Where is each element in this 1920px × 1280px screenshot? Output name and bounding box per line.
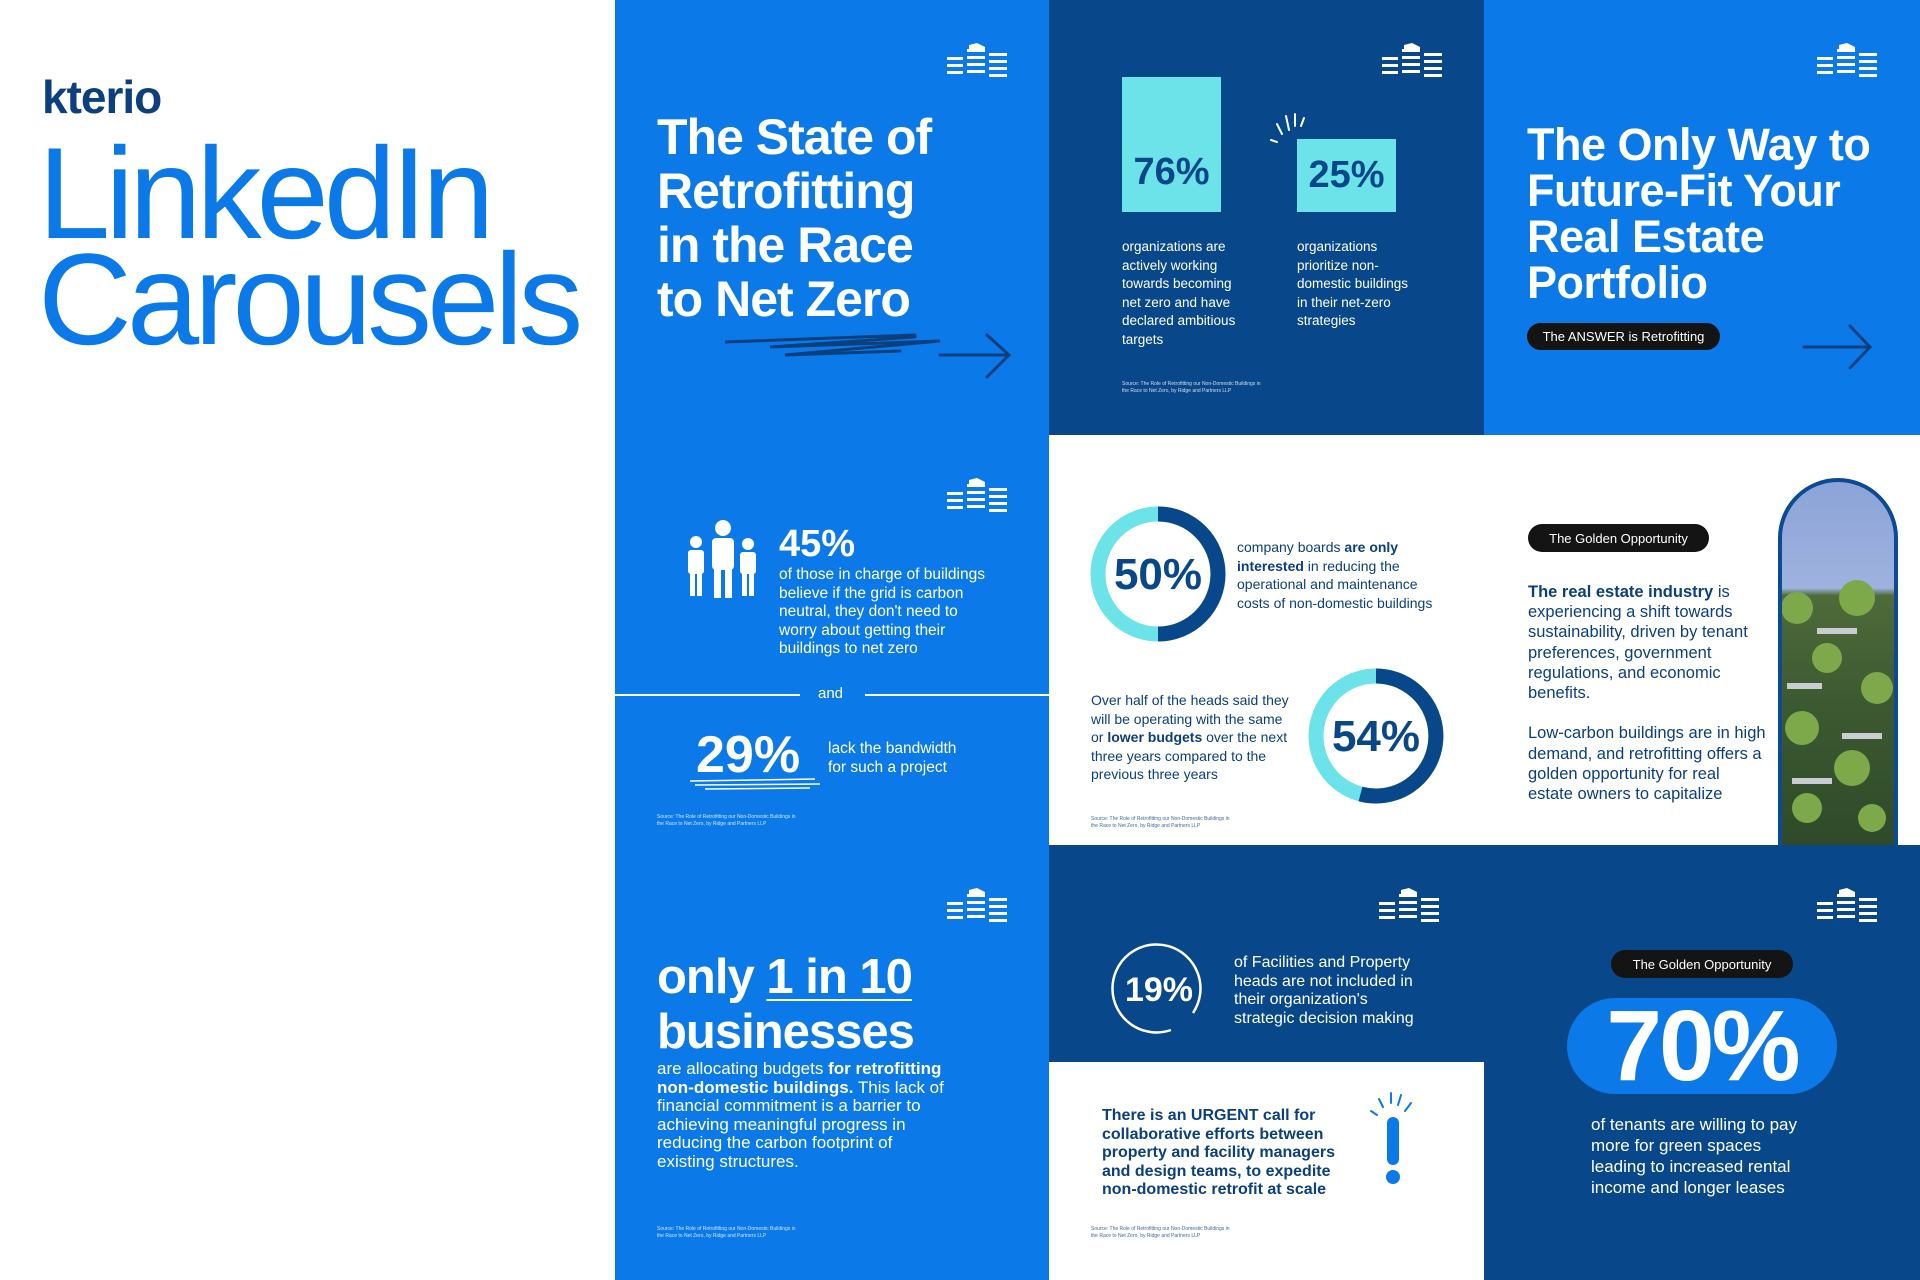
text 29%	[828, 740, 956, 776]
ring 54%	[1308, 668, 1444, 804]
main title	[38, 120, 579, 372]
panel: 45% and 29%	[615, 435, 1049, 845]
icon: buildings	[1382, 43, 1442, 77]
heading: in the Race	[657, 217, 913, 273]
text 29%: lack the bandwidth	[828, 740, 956, 757]
source	[657, 1226, 796, 1239]
panel: 50% and 54% rings	[1049, 435, 1484, 845]
pill	[1527, 323, 1720, 350]
body text: are allocating budgets for retrofitting non-domestic buildings. This lack of financial commitment is a barrier to achieving meaningful progress in reducing the carbon footprint of existing structures.	[657, 1059, 944, 1170]
heading: Future-Fit Your	[1527, 165, 1840, 216]
icon: buildings	[947, 478, 1007, 512]
heading: only 1 in 10	[657, 950, 912, 1004]
scribble underline	[690, 778, 820, 790]
panel: 19% and urgent call	[1049, 845, 1484, 1280]
source	[1122, 381, 1261, 394]
source	[1091, 816, 1230, 829]
stat 70%: 70%	[1606, 990, 1798, 1102]
arrow	[1802, 324, 1872, 370]
divider with and: and	[818, 685, 843, 702]
icon: buildings	[947, 888, 1007, 922]
source: the Race to Net Zero, by Ridge and Partners LLP	[657, 821, 766, 827]
source: Source: The Role of Retrofitting our Non-Domestic Buildings in	[657, 814, 796, 820]
heading	[657, 950, 914, 1059]
source: Source: The Role of Retrofitting our Non-Domestic Buildings in	[1091, 816, 1230, 822]
pill: The Golden Opportunity	[1549, 530, 1688, 546]
stat 70%	[1567, 998, 1837, 1094]
stat 45%: 45%	[779, 523, 855, 565]
pill	[1528, 524, 1709, 552]
main title: Carousels	[38, 226, 578, 372]
text 45%: of those in charge of buildings believe if the grid is carbon neutral, they don't need to worry about getting their buildings to net zero	[779, 566, 985, 657]
text block	[1528, 583, 1766, 803]
heading: to Net Zero	[657, 271, 910, 327]
image: green building arch	[1778, 478, 1898, 845]
heading: Real Estate	[1527, 211, 1764, 262]
pill	[1611, 950, 1793, 978]
text 50%: company boards are only interested in reducing the operational and maintenance costs of non-domestic buildings	[1237, 539, 1432, 610]
heading	[1527, 119, 1870, 308]
source: the Race to Net Zero, by Ridge and Partners LLP	[1091, 823, 1200, 829]
panel: only 1 in 10 businesses	[615, 845, 1049, 1280]
source: the Race to Net Zero, by Ridge and Partners LLP	[1122, 388, 1231, 394]
bar 76%: 76%	[1133, 151, 1210, 193]
icon: people	[688, 520, 756, 598]
bar 25%	[1297, 139, 1396, 212]
scribble and arrow	[725, 333, 1011, 378]
text 54%: Over half of the heads said they will be operating with the same or lower budgets over the next three years compared to the previous three years	[1091, 692, 1289, 782]
ring 50%: 50%	[1114, 550, 1202, 599]
urgent call text: There is an URGENT call for collaborative efforts between property and facility managers and design teams, to expedite non-domestic retrofit at scale	[1102, 1107, 1335, 1198]
bar 76%	[1122, 77, 1221, 212]
source: Source: The Role of Retrofitting our Non-Domestic Buildings in	[657, 1226, 796, 1232]
source	[1091, 1226, 1230, 1239]
ring 54%: 54%	[1332, 712, 1420, 761]
pill: The ANSWER is Retrofitting	[1543, 329, 1704, 344]
text block: Low-carbon buildings are in high demand, and retrofitting offers a golden opportunity for real estate owners to capitalize	[1528, 724, 1766, 803]
text 29%: for such a project	[828, 758, 947, 776]
source: Source: The Role of Retrofitting our Non-Domestic Buildings in	[1091, 1226, 1230, 1232]
icon: spark lines	[1270, 113, 1305, 143]
bar 25%: 25%	[1308, 154, 1385, 196]
icon: buildings	[1817, 43, 1877, 77]
stat 19% circle: 19%	[1125, 971, 1193, 1009]
icon: buildings	[1379, 888, 1439, 922]
brand logo: kterio	[42, 71, 161, 123]
heading: The State of	[657, 109, 931, 165]
source: the Race to Net Zero, by Ridge and Partners LLP	[1091, 1233, 1200, 1239]
icon: buildings	[947, 43, 1007, 77]
heading: The Only Way to	[1527, 119, 1870, 170]
panel: only way to future-fit	[1484, 0, 1920, 435]
pill: The Golden Opportunity	[1633, 956, 1771, 972]
text 25%: organizations prioritize non-domestic buildings in their net-zero strategies	[1297, 239, 1408, 328]
panel: title slide	[615, 0, 1049, 435]
panel: 76% and 25% bars	[1049, 0, 1484, 435]
main title: LinkedIn	[38, 120, 490, 266]
text 76%: organizations are actively working towards becoming net zero and have declared ambitious targets	[1122, 239, 1235, 346]
heading: Portfolio	[1527, 257, 1707, 308]
heading	[657, 109, 932, 327]
stat 19% circle	[1111, 943, 1202, 1034]
icon: exclamation	[1370, 1092, 1412, 1184]
top navy section	[1049, 845, 1484, 1062]
text 19%: of Facilities and Property heads are not included in their organization's strategic decision making	[1234, 954, 1414, 1026]
heading: businesses	[657, 1005, 914, 1059]
ring 50%	[1090, 506, 1226, 642]
icon: buildings	[1817, 888, 1877, 922]
text 70%: of tenants are willing to pay more for green spaces leading to increased rental income and longer leases	[1591, 1115, 1797, 1197]
text block: The real estate industry is experiencing a shift towards sustainability, driven by tenant preferences, government regulations, and economic benefits.	[1528, 583, 1748, 702]
panel: golden opportunity text with image	[1528, 478, 1898, 845]
source	[657, 814, 796, 827]
source: the Race to Net Zero, by Ridge and Partners LLP	[657, 1233, 766, 1239]
source: Source: The Role of Retrofitting our Non-Domestic Buildings in	[1122, 381, 1261, 387]
stat 29%: 29%	[696, 726, 800, 784]
panel: 70% tenants	[1484, 845, 1920, 1280]
heading: Retrofitting	[657, 163, 914, 219]
